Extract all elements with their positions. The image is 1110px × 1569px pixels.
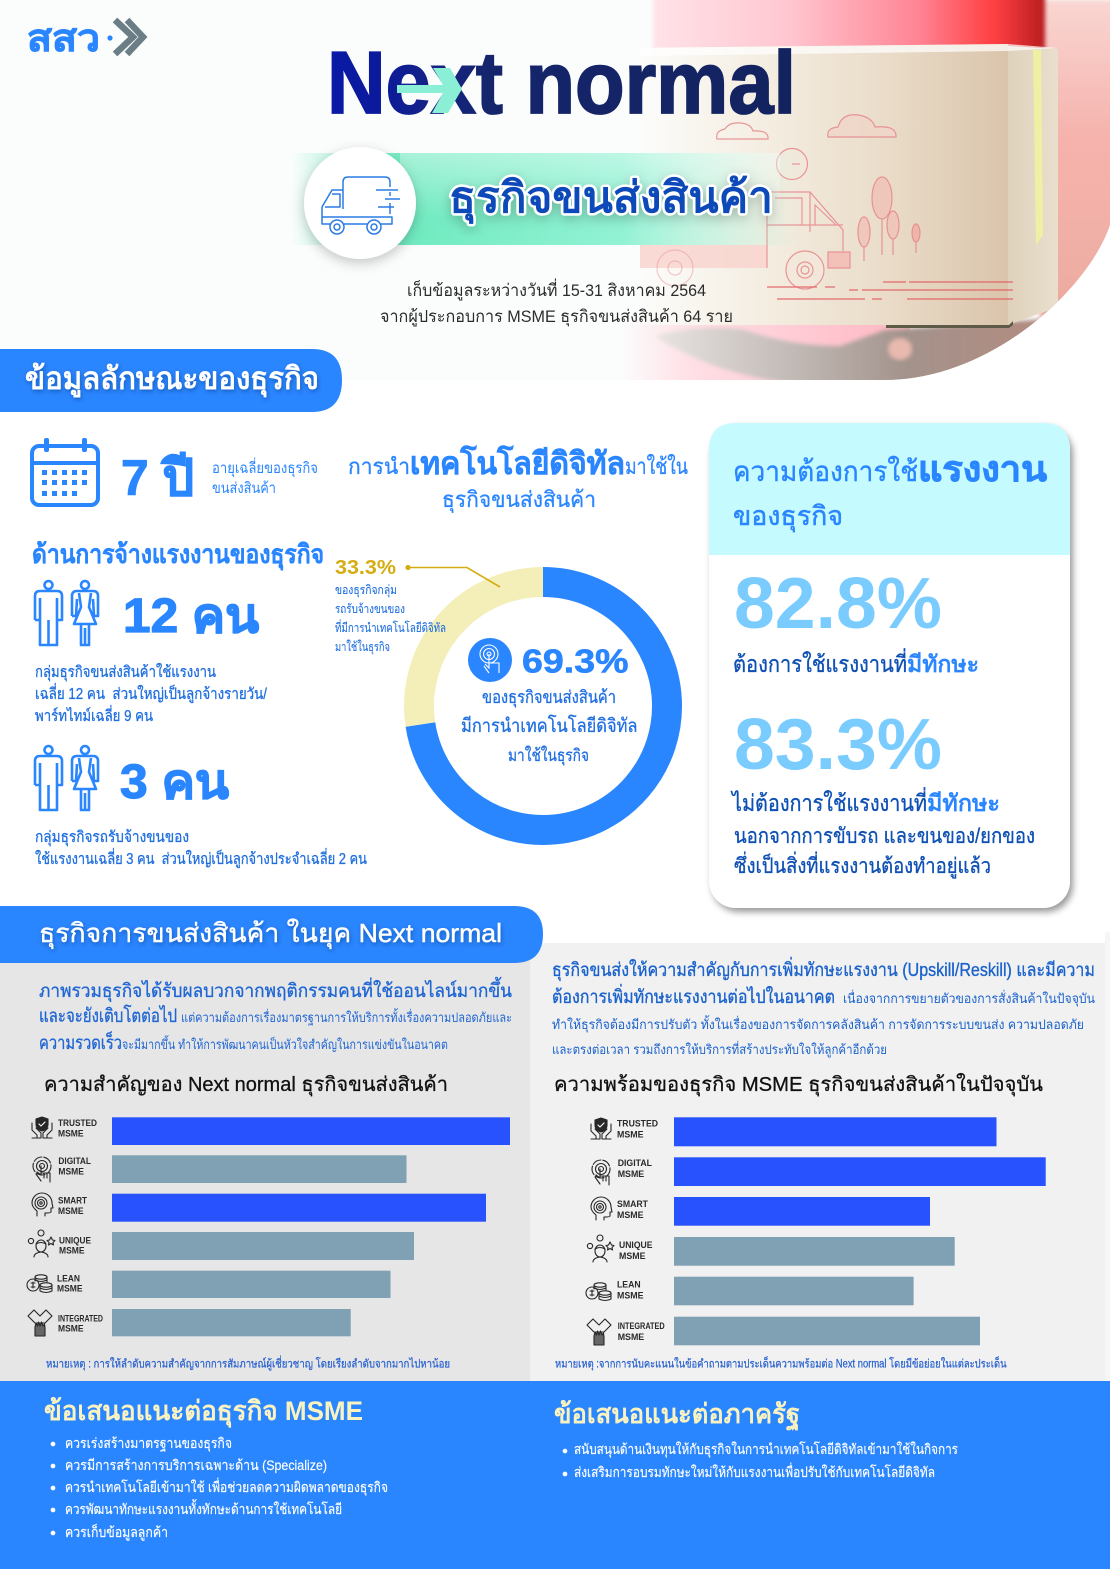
list: government recommendations: ส่งเสริมการอบรมทักษะใหม่ให้กับแรงงานเพื่อปรับใช้กับเทคโนโลยีดิจิทัล bbox=[574, 1463, 935, 1480]
heading: readiness chart: ความพร้อมของธุรกิจ MSME ธุรกิจขนส่งสินค้าในปัจจุบัน bbox=[554, 1073, 1043, 1097]
row: lean: MSME bbox=[57, 1284, 82, 1294]
row: digital bbox=[592, 1157, 1046, 1186]
row: lean: LEAN bbox=[617, 1280, 641, 1290]
caption: average age: ขนส่งสินค้า bbox=[212, 480, 276, 497]
text: delivery workforce note: กลุ่มธุรกิจขนส่งสินค้าใช้แรงงาน bbox=[35, 663, 216, 682]
text: truck hire note bbox=[35, 829, 367, 869]
list: MSME recommendations: ควรเร่งสร้างมาตรฐานของธุรกิจ bbox=[65, 1435, 232, 1452]
heading: digital technology: มาใช้ใน bbox=[625, 454, 688, 479]
panel header bbox=[709, 423, 1070, 555]
text: survey note: จากผู้ประกอบการ MSME ธุรกิจขนส่งสินค้า 64 ราย bbox=[380, 307, 733, 327]
row: trusted: MSME bbox=[617, 1130, 644, 1140]
text: delivery workforce note: เฉลี่ย 12 คน ส่วนใหญ่เป็นลูกจ้างรายวัน/ bbox=[35, 683, 268, 704]
icon: people bbox=[35, 746, 98, 810]
row: unique bbox=[587, 1235, 955, 1266]
row: smart bbox=[591, 1197, 930, 1226]
callout: 33.3%: ของธุรกิจกลุ่ม bbox=[335, 583, 397, 598]
text: right summary: และตรงต่อเวลา รวมถึงการให้บริการที่สร้างประทับใจให้ลูกค้าอีกด้วย bbox=[552, 1041, 887, 1058]
text: donut caption: ของธุรกิจขนส่งสินค้า bbox=[482, 687, 616, 708]
caption: average age bbox=[212, 457, 318, 497]
panel: truck hire workforce bbox=[35, 746, 367, 869]
text: no skilled needed: ไม่ต้องการใช้แรงงานที่ bbox=[730, 787, 927, 816]
row: trusted: MSME bbox=[58, 1129, 84, 1139]
panel: recommendations bbox=[0, 1381, 1110, 1569]
icon: digital touch bbox=[468, 638, 512, 682]
row: trusted: TRUSTED bbox=[58, 1118, 97, 1128]
list: government recommendations: สนับสนุนด้านเงินทุนให้กับธุรกิจในการนำเทคโนโลยีดิจิทัลเข้ามาใช้ในกิจการ bbox=[574, 1441, 958, 1458]
heading: MSME recommendations: ข้อเสนอแนะต่อธุรกิจ MSME bbox=[44, 1396, 363, 1428]
caption: average age: อายุเฉลี่ยของธุรกิจ bbox=[212, 457, 318, 478]
stat: 82.8%: 82.8% bbox=[734, 564, 942, 644]
text: survey note bbox=[380, 278, 733, 327]
text: need skilled: ต้องการใช้แรงงานที่ bbox=[733, 648, 907, 677]
row: smart: MSME bbox=[58, 1206, 84, 1216]
stat: 3 people: 3 คน bbox=[120, 756, 229, 809]
text: donut caption: มาใช้ในธุรกิจ bbox=[508, 745, 589, 766]
note: importance source: หมายเหตุ : การให้ลำดับความสำคัญจากการสัมภาษณ์ผู้เชี่ยวชาญ โดยเรียงลำดับจากมากไปหาน้อย bbox=[46, 1356, 450, 1371]
heading: business type: ธุรกิจขนส่งสินค้า bbox=[449, 174, 773, 225]
icon: calendar bbox=[32, 438, 98, 505]
stat: 7 years: 7 ปี bbox=[121, 450, 194, 506]
heading: digital technology: การนำ bbox=[348, 454, 410, 479]
row: unique: MSME bbox=[59, 1246, 84, 1256]
callout: 33.3%: รถรับจ้างขนของ bbox=[335, 602, 405, 616]
heading: labour demand: ของธุรกิจ bbox=[733, 501, 843, 533]
list: government recommendations bbox=[563, 1441, 958, 1480]
chart: readiness bars bbox=[586, 1117, 1046, 1345]
row: integrated: MSME bbox=[58, 1324, 84, 1334]
list: MSME recommendations: ควรมีการสร้างการบริการเฉพาะด้าน (Specialize) bbox=[65, 1457, 327, 1473]
text: no skilled needed bbox=[730, 787, 1035, 879]
row: digital: MSME bbox=[618, 1169, 644, 1179]
row: smart: SMART bbox=[58, 1196, 87, 1206]
text: no skilled needed: มีทักษะ bbox=[927, 790, 1000, 816]
text: right summary: ต้องการเพิ่มทักษะแรงงานต่อไปในอนาคต bbox=[552, 984, 835, 1007]
text: left summary: ภาพรวมธุรกิจได้รับผลบวกจากพฤติกรรมคนที่ใช้ออนไลน์มากขึ้น bbox=[39, 977, 512, 1003]
heading: next normal section: ธุรกิจการขนส่งสินค้า ในยุค Next normal bbox=[39, 918, 502, 949]
heading: employment: ด้านการจ้างแรงงานของธุรกิจ bbox=[32, 539, 324, 571]
heading: importance chart: ความสำคัญของ Next normal ธุรกิจขนส่งสินค้า bbox=[44, 1074, 448, 1097]
text: donut caption: มีการนำเทคโนโลยีดิจิทัล bbox=[461, 714, 638, 737]
text: left summary: และจะยังเติบโตต่อไป bbox=[39, 1004, 177, 1027]
heading: labour demand: แรงงาน bbox=[918, 450, 1047, 489]
row: lean: LEAN bbox=[57, 1273, 80, 1283]
icon: red line illustration on box bbox=[640, 115, 1013, 299]
row: digital: DIGITAL bbox=[58, 1156, 91, 1166]
heading: digital technology bbox=[348, 445, 688, 513]
panel: delivery workforce bbox=[35, 581, 268, 725]
text: right summary: ทำให้ธุรกิจต้องมีการปรับตัว ทั้งในเรื่องของการจัดการคลังสินค้า การจัดการระบบขนส่ง ความปลอดภัย bbox=[552, 1015, 1084, 1033]
row: digital: DIGITAL bbox=[618, 1158, 652, 1168]
row: trusted: TRUSTED bbox=[617, 1119, 658, 1129]
list: MSME recommendations: ควรพัฒนาทักษะแรงงานทั้งทักษะด้านการใช้เทคโนโลยี bbox=[65, 1499, 342, 1517]
stat: 12 people: 12 คน bbox=[123, 590, 259, 643]
row: lean bbox=[27, 1271, 390, 1298]
panel: right next normal background bbox=[530, 932, 1110, 1381]
text: no skilled needed: นอกจากการขับรถ และขนของ/ยกของ bbox=[734, 825, 1035, 848]
row: integrated bbox=[28, 1309, 351, 1336]
row: unique bbox=[28, 1230, 414, 1260]
note: readiness source: หมายเหตุ :จากการนับคะแนนในข้อคำถามตามประเด็นความพร้อมต่อ Next normal โดยมีข้อย่อยในแต่ละประเด็น bbox=[555, 1356, 1007, 1371]
list: MSME recommendations bbox=[51, 1435, 388, 1541]
text: delivery workforce note: พาร์ทไทม์เฉลี่ย 9 คน bbox=[35, 705, 153, 725]
row: smart: SMART bbox=[617, 1199, 648, 1209]
panel: business age bbox=[32, 438, 318, 506]
row: lean bbox=[586, 1277, 914, 1305]
panel: labour demand bbox=[709, 423, 1070, 908]
text: delivery workforce note bbox=[35, 663, 268, 725]
stat: 83.3%: 83.3% bbox=[734, 705, 942, 785]
list: MSME recommendations: ควรนำเทคโนโลยีเข้ามาใช้ เพื่อช่วยลดความผิดพลาดของธุรกิจ bbox=[65, 1478, 388, 1496]
text: right summary bbox=[552, 957, 1095, 1058]
heading: business profile bbox=[0, 349, 342, 412]
row: smart: MSME bbox=[617, 1210, 644, 1220]
panel: left next normal background bbox=[0, 960, 530, 1381]
callout: 33.3%: ที่มีการนำเทคโนโลยีดิจิทัล bbox=[335, 619, 446, 635]
title: Next normal: Next normal bbox=[327, 33, 796, 132]
callout: 33.3%: มาใช้ในธุรกิจ bbox=[335, 640, 390, 655]
heading: labour demand bbox=[733, 450, 1047, 533]
row: digital bbox=[33, 1155, 406, 1183]
heading: government recommendations: ข้อเสนอแนะต่อภาครัฐ bbox=[554, 1399, 800, 1432]
row: digital: MSME bbox=[58, 1167, 84, 1177]
chart: digital adoption donut bbox=[335, 557, 667, 830]
list: MSME recommendations: ควรเก็บข้อมูลลูกค้า bbox=[65, 1523, 168, 1541]
row: integrated: INTEGRATED bbox=[618, 1321, 665, 1331]
row: integrated: INTEGRATED bbox=[58, 1314, 103, 1324]
text: survey note: เก็บข้อมูลระหว่างวันที่ 15-31 สิงหาคม 2564 bbox=[407, 278, 706, 301]
row: unique: MSME bbox=[619, 1251, 646, 1261]
text: donut caption bbox=[461, 687, 638, 766]
heading: business profile: ข้อมูลลักษณะของธุรกิจ bbox=[25, 361, 319, 398]
text: left summary bbox=[39, 977, 512, 1054]
text: left summary: แต่ความต้องการเรื่องมาตรฐานการให้บริการทั้งเรื่องความปลอดภัยและ bbox=[181, 1008, 512, 1026]
row: unique: UNIQUE bbox=[619, 1240, 652, 1250]
panel: hero background bbox=[635, 0, 1110, 380]
text: truck hire note: กลุ่มธุรกิจรถรับจ้างขนของ bbox=[35, 829, 189, 847]
heading: labour demand: ความต้องการใช้ bbox=[733, 455, 918, 487]
row: lean: MSME bbox=[617, 1291, 644, 1301]
row: integrated bbox=[587, 1317, 980, 1345]
text: right summary: เนื่องจากการขยายตัวของการสั่งสินค้าในปัจจุบัน bbox=[843, 990, 1095, 1007]
heading: next normal section bbox=[0, 906, 543, 963]
stat: 69.3%: 69.3% bbox=[522, 642, 628, 680]
banner: business type bbox=[290, 147, 800, 259]
green ribbon bbox=[290, 153, 800, 245]
heading: digital technology: เทคโนโลยีดิจิทัล bbox=[410, 445, 625, 481]
row: trusted bbox=[591, 1117, 996, 1146]
text: no skilled needed: ซึ่งเป็นสิ่งที่แรงงานต้องทำอยู่แล้ว bbox=[734, 851, 991, 879]
text: left summary: ความรวดเร็ว bbox=[39, 1030, 122, 1054]
row: trusted bbox=[32, 1117, 510, 1145]
icon: truck in white circle bbox=[304, 147, 416, 259]
text: left summary: จะมีมากขึ้น ทำให้การพัฒนาคนเป็นหัวใจสำคัญในการแข่งขันในอนาคต bbox=[122, 1035, 448, 1052]
heading: digital technology: ธุรกิจขนส่งสินค้า bbox=[442, 487, 596, 513]
row: smart bbox=[32, 1193, 486, 1222]
logo bbox=[27, 18, 143, 60]
text: need skilled: มีทักษะ bbox=[907, 651, 979, 677]
row: integrated: MSME bbox=[618, 1332, 644, 1342]
callout: 33.3%: 33.3% bbox=[335, 557, 396, 579]
icon: people bbox=[35, 581, 98, 645]
callout: 33.3% bbox=[335, 557, 500, 655]
row: unique: UNIQUE bbox=[59, 1236, 91, 1246]
logo: สสว bbox=[27, 18, 100, 60]
text: truck hire note: ใช้แรงงานเฉลี่ย 3 คน ส่วนใหญ่เป็นลูกจ้างประจำเฉลี่ย 2 คน bbox=[35, 848, 367, 869]
chart: importance bars bbox=[27, 1117, 510, 1336]
